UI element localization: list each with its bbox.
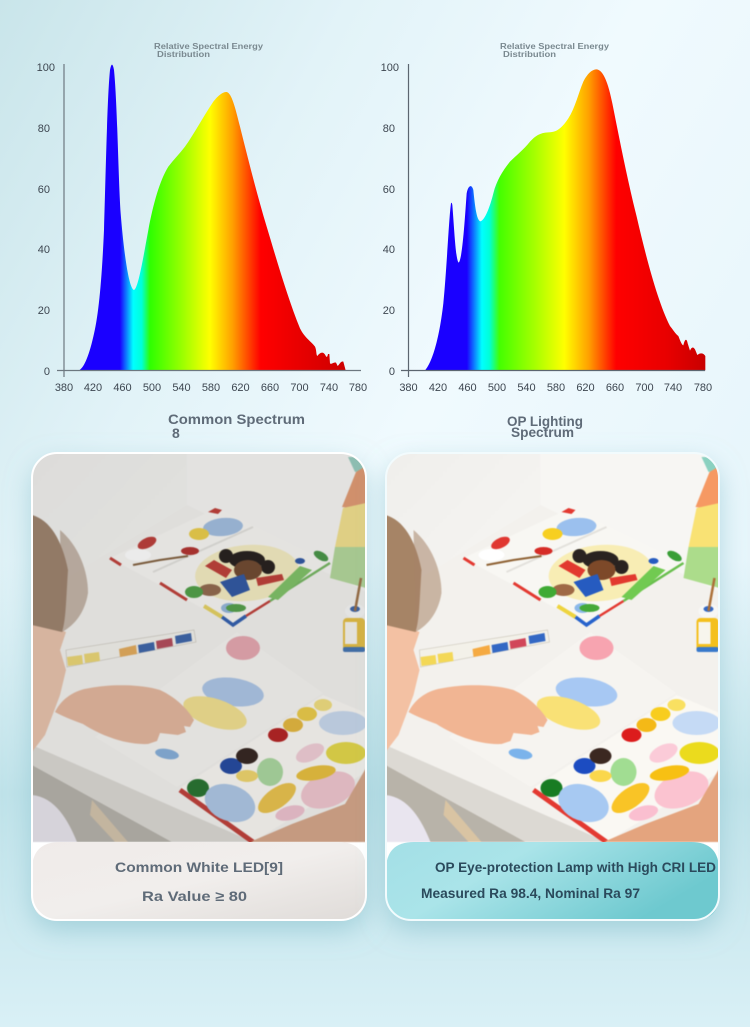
x axis labels: 700 bbox=[635, 382, 654, 394]
x axis labels: 700 bbox=[290, 382, 309, 394]
axes bbox=[57, 64, 361, 377]
panel: OP eye-protection lamp photo card bbox=[386, 453, 720, 920]
x axis labels: 460 bbox=[458, 382, 477, 394]
chart subtitle: relative spectral energy: Relative Spectral Energy bbox=[154, 42, 264, 51]
y axis labels: 100 bbox=[37, 62, 55, 74]
x axis labels: 540 bbox=[172, 382, 191, 394]
y axis labels: 60 bbox=[383, 184, 395, 196]
x axis labels: 620 bbox=[231, 382, 250, 394]
x axis labels: 780 bbox=[694, 382, 712, 394]
chart subtitle: relative spectral energy: Relative Spectral Energy bbox=[500, 42, 610, 51]
y axis labels: 80 bbox=[38, 123, 50, 135]
caption panel: OP eye-protection lamp bbox=[386, 842, 719, 920]
x axis labels: 780 bbox=[349, 382, 367, 394]
x axis labels: 420 bbox=[84, 382, 102, 394]
photo: child painting under OP lamp bbox=[386, 453, 720, 842]
x axis labels: 460 bbox=[113, 382, 132, 394]
x axis labels: 580 bbox=[202, 382, 220, 394]
chart subtitle: relative spectral energy bbox=[500, 42, 610, 59]
panel: OP lighting spectrum chart bbox=[381, 42, 712, 440]
y axis labels bbox=[37, 62, 55, 378]
x axis labels bbox=[55, 382, 367, 394]
caption panel: common white LED: Ra Value ≥ 80 bbox=[142, 888, 247, 904]
x axis labels: 500 bbox=[143, 382, 161, 394]
chart heading: OP lighting spectrum: OP Lighting bbox=[507, 413, 583, 429]
photo: child painting under common LED bbox=[32, 453, 367, 842]
chart subtitle: relative spectral energy: Distribution bbox=[503, 50, 556, 59]
y axis labels: 80 bbox=[383, 123, 395, 135]
chart subtitle: relative spectral energy: Distribution bbox=[157, 50, 210, 59]
x axis labels: 380 bbox=[55, 382, 73, 394]
chart heading: common spectrum: 8 bbox=[172, 425, 180, 441]
caption panel: common white LED: Common White LED[9] bbox=[115, 859, 283, 875]
panel: common white LED photo card bbox=[32, 453, 367, 920]
chart heading: common spectrum bbox=[168, 411, 305, 441]
chart heading: common spectrum: Common Spectrum bbox=[168, 411, 305, 427]
y axis labels: 60 bbox=[38, 184, 50, 196]
spectrum curve: OP lighting bbox=[425, 69, 705, 370]
y axis labels: 20 bbox=[38, 305, 50, 317]
x axis labels: 500 bbox=[488, 382, 506, 394]
y axis labels: 40 bbox=[38, 244, 50, 256]
x axis labels: 740 bbox=[320, 382, 338, 394]
y axis labels: 0 bbox=[389, 366, 395, 378]
x axis labels: 380 bbox=[399, 382, 418, 394]
y axis labels bbox=[381, 62, 399, 378]
chart subtitle: relative spectral energy bbox=[154, 42, 264, 59]
caption panel: OP eye-protection lamp: Measured Ra 98.4, Nominal Ra 97 bbox=[421, 886, 640, 901]
panel: common spectrum chart bbox=[37, 42, 367, 441]
y axis labels: 100 bbox=[381, 62, 399, 74]
x axis labels: 660 bbox=[261, 382, 279, 394]
chart heading: OP lighting spectrum bbox=[507, 413, 583, 440]
x axis labels bbox=[399, 382, 712, 394]
x axis labels: 620 bbox=[576, 382, 595, 394]
chart heading: OP lighting spectrum: Spectrum bbox=[511, 424, 574, 440]
y axis labels: 20 bbox=[383, 305, 395, 317]
caption panel: common white LED bbox=[32, 842, 366, 920]
x axis labels: 420 bbox=[429, 382, 447, 394]
caption panel: OP eye-protection lamp: OP Eye-protection Lamp with High CRI LED bbox=[435, 860, 716, 875]
x axis labels: 540 bbox=[517, 382, 536, 394]
y axis labels: 0 bbox=[44, 366, 50, 378]
axes bbox=[401, 64, 705, 377]
x axis labels: 740 bbox=[664, 382, 682, 394]
y axis labels: 40 bbox=[383, 244, 395, 256]
x axis labels: 660 bbox=[606, 382, 624, 394]
spectrum curve: common LED bbox=[79, 65, 346, 370]
x axis labels: 580 bbox=[547, 382, 565, 394]
